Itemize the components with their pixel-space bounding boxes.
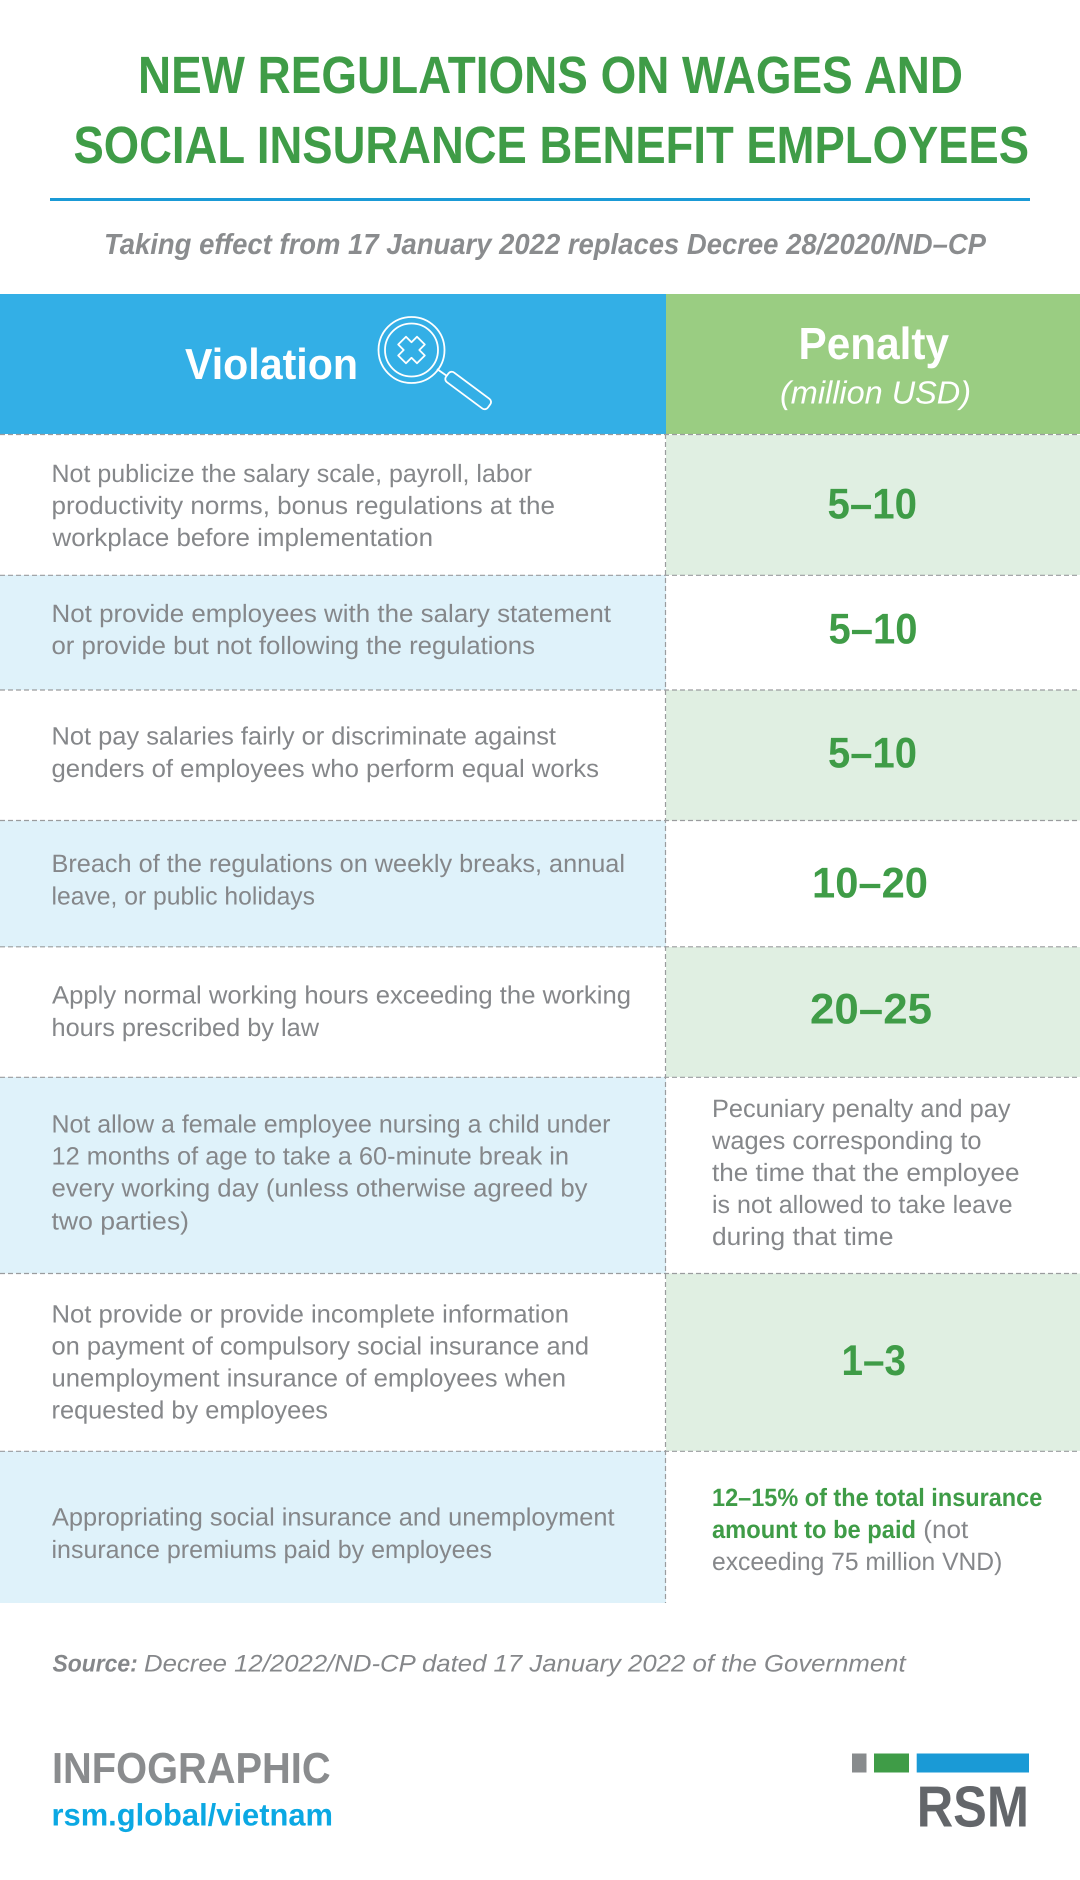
logo: RSM: RSM bbox=[917, 1774, 1029, 1840]
row 2: or provide but not following the regulations bbox=[52, 632, 535, 660]
penalty note: 12–15%: 12–15% of the total insurance bbox=[712, 1484, 1042, 1512]
penalty note: 12–15% bbox=[712, 1484, 1042, 1576]
table header: penalty: Penalty bbox=[798, 318, 949, 369]
footer label bbox=[52, 1745, 333, 1832]
row 3: 5–10 bbox=[828, 730, 917, 778]
penalty note: pecuniary penalty: the time that the employee bbox=[712, 1159, 1020, 1187]
row 7: unemployment insurance of employees when bbox=[52, 1364, 566, 1392]
row 3: genders of employees who perform equal works bbox=[52, 755, 599, 783]
row 2: Not provide employees with the salary statement bbox=[52, 600, 611, 628]
table header: penalty bbox=[666, 294, 1080, 434]
row 7 bbox=[52, 1274, 1080, 1451]
penalty note: pecuniary penalty: wages corresponding to bbox=[711, 1127, 982, 1155]
row 1: workplace before implementation bbox=[51, 524, 433, 552]
table header: violation: Violation bbox=[185, 341, 358, 389]
icon: magnifying glass with cross bbox=[378, 317, 493, 411]
row 4: 10–20 bbox=[812, 860, 928, 908]
penalty note: pecuniary penalty bbox=[711, 1095, 1020, 1251]
row 1: Not publicize the salary scale, payroll, labor bbox=[52, 460, 532, 488]
row 7: on payment of compulsory social insurance and bbox=[52, 1332, 589, 1360]
row 4: Breach of the regulations on weekly breaks, annual bbox=[52, 850, 625, 878]
penalty note: 12–15%: (not bbox=[923, 1516, 968, 1544]
row 3 bbox=[52, 690, 1080, 820]
row 5 bbox=[52, 947, 1080, 1077]
footer label: INFOGRAPHIC bbox=[52, 1745, 331, 1793]
row 1: 5–10 bbox=[828, 480, 917, 528]
subtitle: Taking effect from 17 January 2022 replaces Decree 28/2020/ND–CP bbox=[104, 229, 987, 261]
penalty note: 12–15%: exceeding 75 million VND) bbox=[712, 1548, 1002, 1576]
table header: penalty: (million USD) bbox=[780, 374, 971, 410]
table header: violation bbox=[0, 294, 666, 434]
row 4 bbox=[0, 820, 928, 947]
row 4: leave, or public holidays bbox=[52, 882, 315, 910]
row 5: Apply normal working hours exceeding the working bbox=[52, 982, 631, 1010]
row 7: Not provide or provide incomplete information bbox=[52, 1300, 569, 1328]
row 6: two parties) bbox=[52, 1208, 189, 1236]
row 6: every working day (unless otherwise agreed by bbox=[52, 1174, 588, 1202]
row 8: Appropriating social insurance and unemployment bbox=[52, 1504, 615, 1532]
row 6: 12 months of age to take a 60-minute break in bbox=[52, 1142, 569, 1170]
penalty note: pecuniary penalty: Pecuniary penalty and pay bbox=[712, 1095, 1011, 1123]
row 8 bbox=[0, 1451, 1042, 1603]
title: NEW REGULATIONS ON WAGES AND bbox=[138, 46, 963, 105]
row 8: insurance premiums paid by employees bbox=[52, 1536, 492, 1564]
row 6 bbox=[0, 1077, 1020, 1274]
penalty note: 12–15%: amount to be paid bbox=[712, 1516, 916, 1544]
row 5: 20–25 bbox=[810, 986, 932, 1034]
row 3: Not pay salaries fairly or discriminate against bbox=[52, 722, 556, 750]
penalty note: pecuniary penalty: during that time bbox=[712, 1223, 894, 1251]
source: Source: bbox=[52, 1650, 138, 1678]
source: Decree 12/2022/ND-CP dated 17 January 2022 of the Government bbox=[144, 1650, 907, 1678]
row 1: productivity norms, bonus regulations at the bbox=[52, 492, 555, 520]
row 2: 5–10 bbox=[828, 606, 918, 654]
row 7: requested by employees bbox=[52, 1396, 328, 1424]
footer label: rsm.global/vietnam bbox=[52, 1798, 333, 1832]
row 5: hours prescribed by law bbox=[52, 1014, 320, 1042]
row 2 bbox=[0, 575, 918, 690]
penalty note: pecuniary penalty: is not allowed to take leave bbox=[712, 1191, 1012, 1219]
logo: RSM bbox=[852, 1754, 1029, 1840]
row 1 bbox=[51, 435, 1080, 575]
row 6: Not allow a female employee nursing a child under bbox=[52, 1110, 610, 1138]
title bbox=[74, 46, 1029, 175]
row 7: 1–3 bbox=[842, 1337, 906, 1385]
